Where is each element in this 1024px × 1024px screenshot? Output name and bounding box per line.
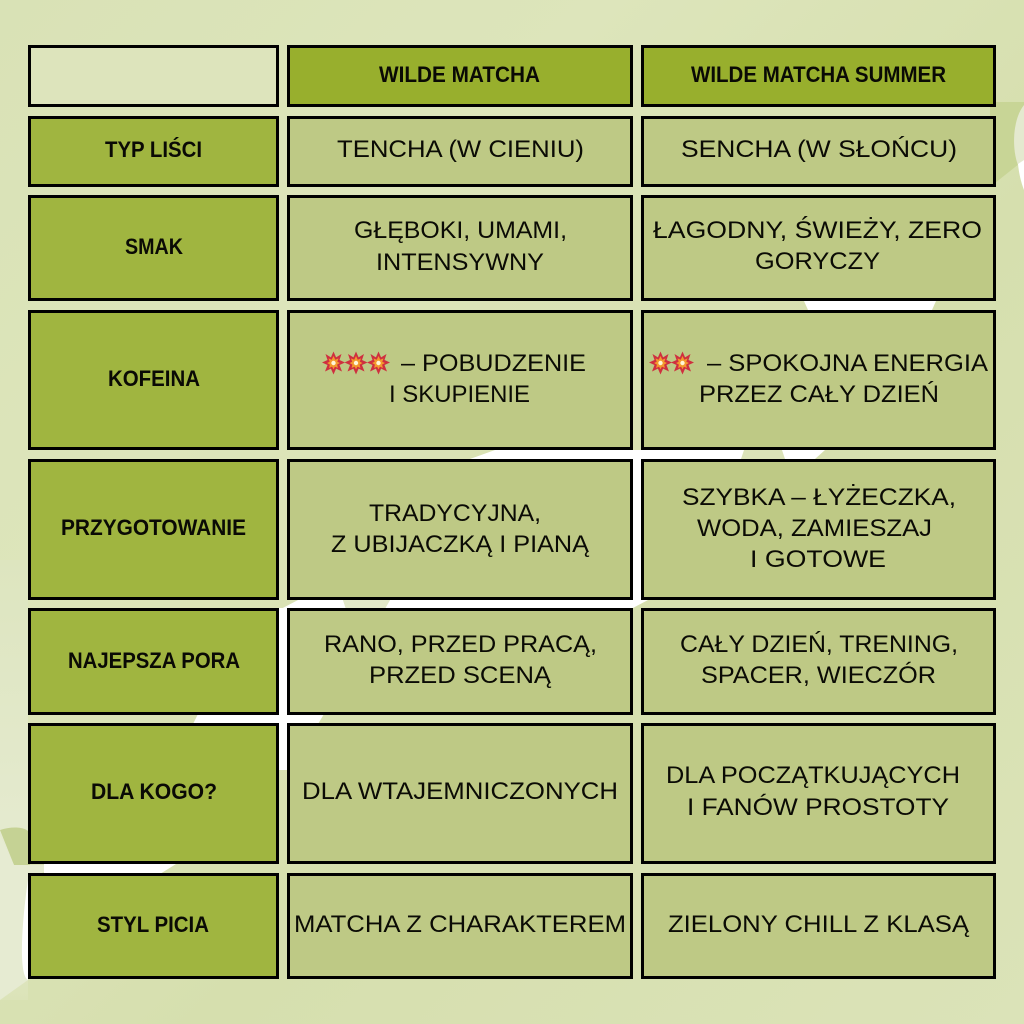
cell: smak Wilde Matcha [288,196,632,300]
icon: two explosions [649,352,694,374]
cell: smak Summer: GORYCZY [755,248,880,275]
row label: Typ liści [30,118,278,186]
cell: styl Wilde Matcha: MATCHA Z CHARAKTEREM [294,911,626,938]
row label: Najepsza pora [30,610,278,714]
cell: kofeina Summer [642,312,994,448]
cell: dla kogo Summer [642,724,994,862]
row label: Typ liści: TYP LIŚCI [105,137,202,162]
cell: kofeina Summer: PRZEZ CAŁY DZIEŃ [699,381,939,408]
cell: kofeina Wilde Matcha [288,312,632,448]
cell: przygotowanie Summer: SZYBKA – ŁYŻECZKA, [682,484,956,511]
heading: Wilde Matcha [288,46,632,106]
row label: Smak [30,196,278,300]
row label: Kofeina: KOFEINA [108,366,200,391]
heading: Wilde Matcha: WILDE MATCHA [379,62,540,87]
panel: empty corner cell [30,46,278,106]
cell: pora Wilde Matcha: PRZED SCENĄ [369,662,552,689]
cell: przygotowanie Summer: I GOTOWE [750,546,886,573]
row label: Styl picia: STYL PICIA [97,912,209,937]
cell: pora Summer [642,610,994,714]
cell: przygotowanie Summer: WODA, ZAMIESZAJ [697,515,932,542]
heading: Wilde Matcha Summer: WILDE MATCHA SUMMER [691,62,946,87]
cell: pora Summer: CAŁY DZIEŃ, TRENING, [680,631,958,658]
cell: styl Summer: ZIELONY CHILL Z KLASĄ [668,911,970,938]
cell: Tencha: TENCHA (W CIENIU) [337,136,584,163]
cell: smak Summer [642,196,994,300]
row label: Dla kogo?: DLA KOGO? [91,779,217,804]
cell: pora Wilde Matcha [288,610,632,714]
cell: Sencha [642,118,994,186]
heading: Wilde Matcha Summer [642,46,994,106]
cell: pora Wilde Matcha: RANO, PRZED PRACĄ, [324,631,597,658]
row label: Przygotowanie [30,460,278,598]
row label: Przygotowanie: PRZYGOTOWANIE [61,515,246,540]
cell: przygotowanie Wilde Matcha: Z UBIJACZKĄ I PIANĄ [331,531,590,558]
cell: smak Wilde Matcha: INTENSYWNY [376,249,544,276]
row label: Dla kogo? [30,724,278,862]
cell: Tencha [288,118,632,186]
cell: kofeina Summer: – SPOKOJNA ENERGIA [707,350,988,377]
cell: dla kogo Summer: I FANÓW PROSTOTY [687,794,949,821]
cell: styl Wilde Matcha [288,874,632,978]
cell: kofeina Wilde Matcha: – POBUDZENIE [401,350,586,377]
cell: Sencha: SENCHA (W SŁOŃCU) [681,136,957,163]
row label: Styl picia [30,874,278,978]
row label: Najepsza pora: NAJEPSZA PORA [68,648,240,673]
cell: smak Wilde Matcha: GŁĘBOKI, UMAMI, [354,217,567,244]
cell: przygotowanie Wilde Matcha [288,460,632,598]
cell: pora Summer: SPACER, WIECZÓR [701,662,936,689]
icon: three explosions [322,352,390,374]
cell: kofeina Wilde Matcha: I SKUPIENIE [389,381,530,408]
row label: Smak: SMAK [125,234,183,259]
cell: przygotowanie Wilde Matcha: TRADYCYJNA, [369,500,541,527]
cell: przygotowanie Summer [642,460,994,598]
cell: smak Summer: ŁAGODNY, ŚWIEŻY, ZERO [653,216,982,244]
row label: Kofeina [30,312,278,448]
cell: styl Summer [642,874,994,978]
cell: dla kogo Wilde Matcha: DLA WTAJEMNICZONYCH [302,778,618,805]
cell: dla kogo Summer: DLA POCZĄTKUJĄCYCH [666,762,960,789]
cell: dla kogo Wilde Matcha [288,724,632,862]
